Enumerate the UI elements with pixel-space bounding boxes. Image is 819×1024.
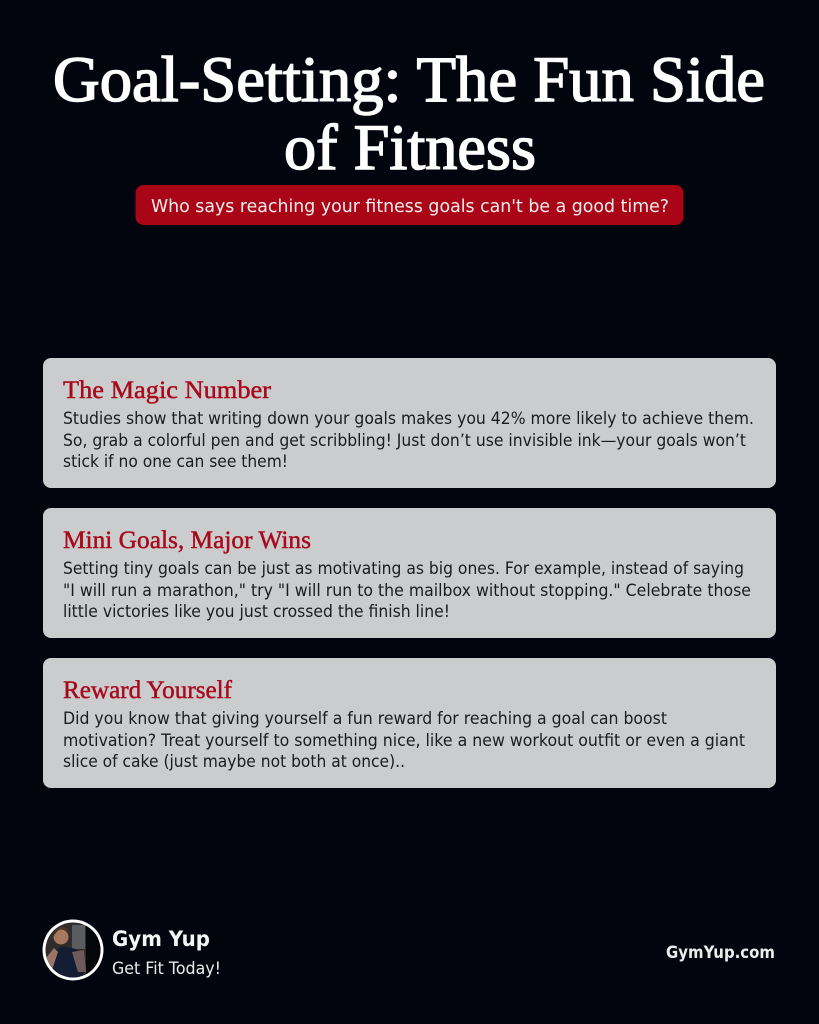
text block: The Magic Number body: Studies show that writing down your goals makes you 42% more likely to achieve them. (63, 409, 754, 428)
text block: Reward Yourself body: slice of cake (just maybe not both at once).. (63, 752, 405, 771)
heading: Mini Goals, Major Wins: Mini Goals, Major Wins (63, 527, 311, 554)
subtitle banner: Who says reaching your fitness goals can't be a good time? (151, 196, 669, 217)
heading: Reward Yourself: Reward Yourself (63, 677, 233, 704)
text block: Reward Yourself body (63, 709, 746, 771)
text block: The Magic Number body (63, 409, 754, 471)
text block: Reward Yourself body: Did you know that giving yourself a fun reward for reaching a goal can boost (63, 709, 668, 728)
icon: profile photo (42, 920, 104, 980)
text block: Mini Goals body: Setting tiny goals can be just as motivating as big ones. For example, instead of saying (63, 559, 744, 578)
brand name: Gym Yup (112, 927, 210, 951)
panel: Mini Goals, Major Wins (43, 508, 776, 638)
text block: Reward Yourself body: motivation? Treat yourself to something nice, like a new workout outfit or even a giant (63, 731, 746, 750)
heading: The Magic Number: The Magic Number (63, 377, 272, 404)
title: of Fitness (284, 112, 536, 184)
tagline: Get Fit Today! (112, 959, 221, 978)
subtitle banner (136, 185, 684, 225)
title (53, 44, 765, 184)
title: Goal-Setting: The Fun Side (53, 44, 765, 116)
text block: The Magic Number body: So, grab a colorful pen and get scribbling! Just don’t use invisible ink—your goals won’t (63, 431, 746, 450)
panel: The Magic Number (43, 358, 776, 488)
text block: Mini Goals body: "I will run a marathon," try "I will run to the mailbox without stopping." Celebrate those (63, 581, 751, 600)
text block: The Magic Number body: stick if no one can see them! (63, 452, 288, 471)
panel: Reward Yourself (43, 658, 776, 788)
text block: Mini Goals body: little victories like you just crossed the finish line! (63, 602, 450, 621)
text block: Mini Goals body (63, 559, 751, 621)
website: GymYup.com (666, 943, 775, 962)
